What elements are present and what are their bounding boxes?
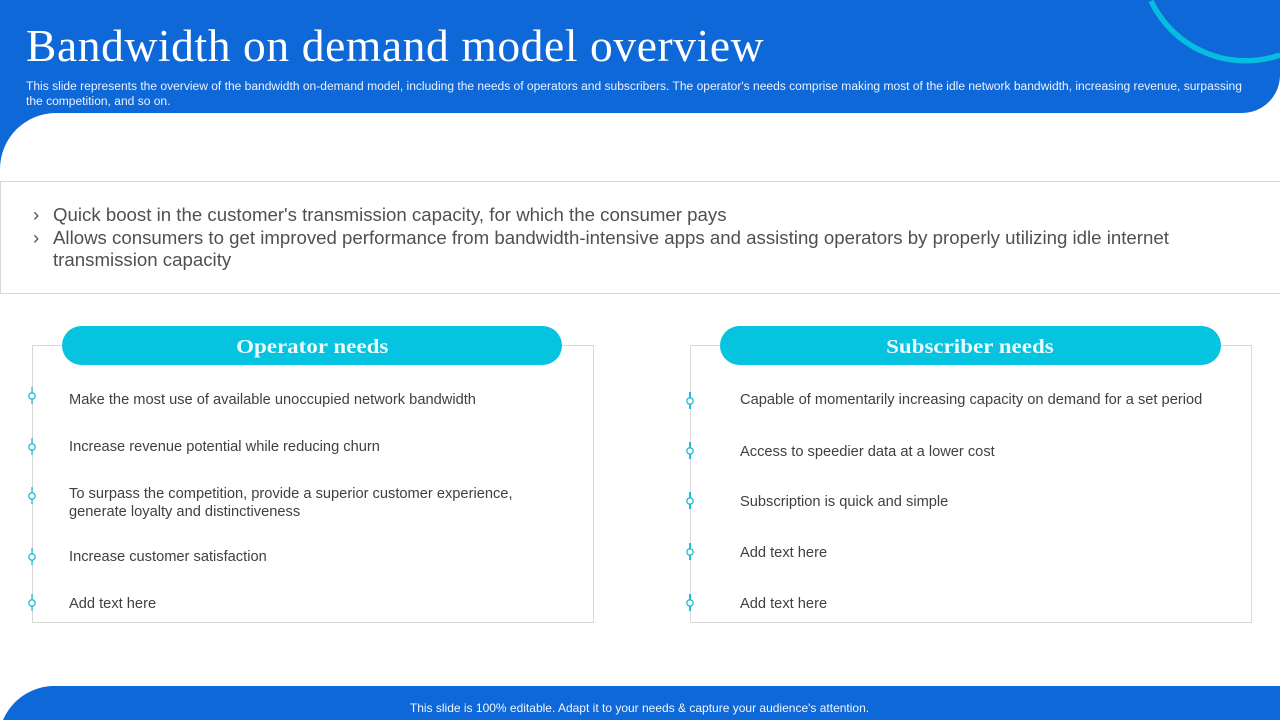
item: Add text here: [740, 596, 827, 612]
item: generate loyalty and distinctiveness: [69, 504, 300, 520]
footer text: This slide is 100% editable. Adapt it to your needs & capture your audience's attention.: [410, 701, 869, 715]
item: Increase customer satisfaction: [69, 549, 267, 565]
footer band: [3, 686, 1280, 720]
item: Add text here: [740, 545, 827, 561]
operator list text: [69, 392, 513, 612]
subscriber list text: [740, 392, 1202, 612]
heading: subscriber needs: Subscriber needs: [886, 336, 1053, 358]
heading: subscriber needs: [720, 326, 1221, 365]
item: To surpass the competition, provide a superior customer experience,: [69, 486, 513, 502]
bullet marker 1: ›: [33, 204, 39, 225]
item: Increase revenue potential while reducing churn: [69, 439, 380, 455]
item: Access to speedier data at a lower cost: [740, 444, 995, 460]
subtitle: the competition, and so on.: [26, 94, 170, 108]
bullet 1: Quick boost in the customer's transmission capacity, for which the consumer pays: [53, 204, 727, 225]
item: [69, 486, 513, 520]
bullet 2: Allows consumers to get improved performance from bandwidth-intensive apps and assisting operators by properly utilizing idle internet: [53, 227, 1169, 248]
heading: operator needs: [62, 326, 562, 365]
summary panel: [0, 181, 1280, 294]
heading: operator needs: Operator needs: [236, 336, 388, 358]
bullet 2 continuation: transmission capacity: [53, 249, 231, 270]
item: Add text here: [69, 596, 156, 612]
item: Capable of momentarily increasing capacity on demand for a set period: [740, 392, 1202, 408]
panel: operator needs: [32, 345, 594, 623]
subtitle: [26, 79, 1242, 108]
item: Subscription is quick and simple: [740, 494, 948, 510]
item: Make the most use of available unoccupied network bandwidth: [69, 392, 476, 408]
title: Bandwidth on demand model overview: [26, 20, 764, 71]
subtitle: This slide represents the overview of the bandwidth on-demand model, including the needs of operators and subscribers. The operator's needs comprise making most of the idle network bandwidth, increasing revenue, surpassing: [26, 79, 1242, 93]
header band: [0, 0, 1280, 168]
panel: subscriber needs: [690, 345, 1252, 623]
bullet marker 2: ›: [33, 227, 39, 248]
